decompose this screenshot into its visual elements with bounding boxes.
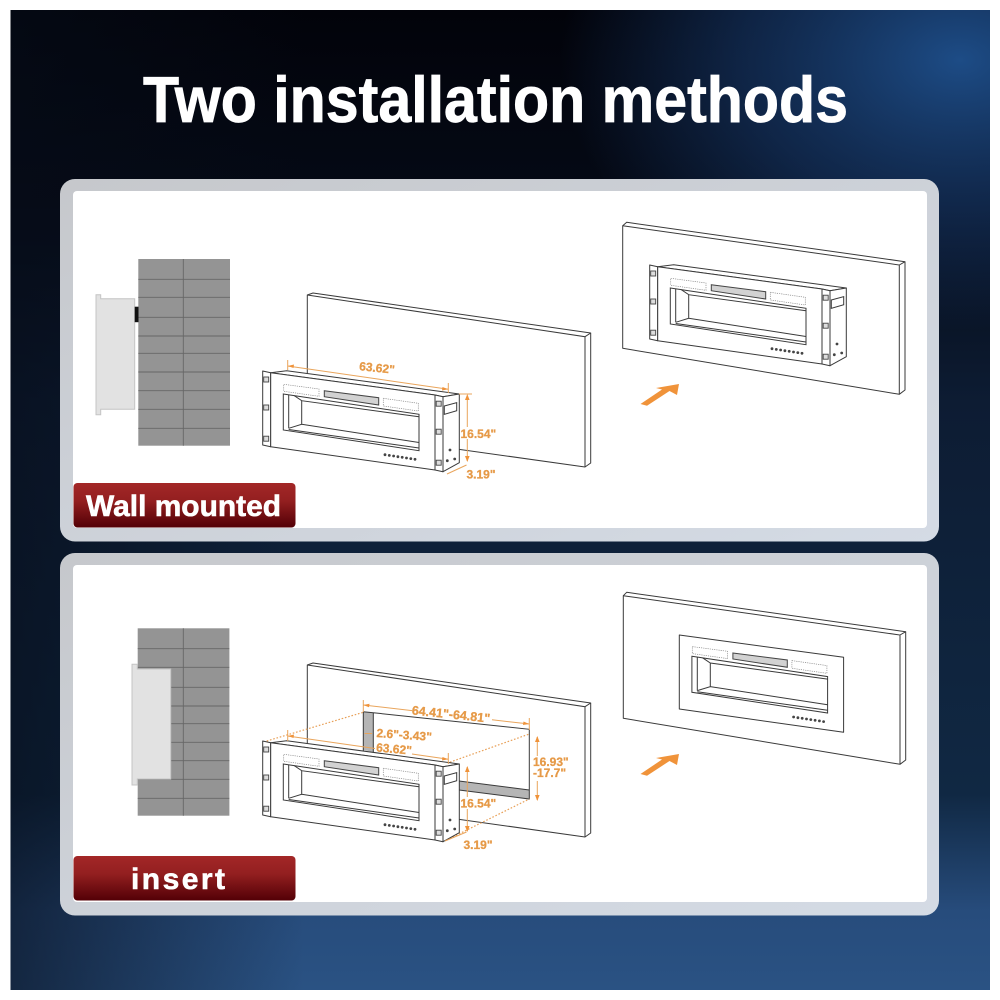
wall with fireplace and dimensions [263, 293, 591, 482]
dimension: opening depth: 2.6"-3.43" [376, 726, 432, 744]
title: Two installation methods [143, 63, 848, 136]
label: insert: insert [131, 863, 225, 896]
label: wall mounted: Wall mounted [86, 490, 281, 523]
wall with opening, fireplace and dimensions [263, 663, 591, 852]
dimension: opening height [532, 736, 569, 801]
dimension: depth [447, 465, 496, 482]
dotted outlines [267, 712, 529, 840]
dimension: height: 16.54" [460, 427, 496, 441]
arrow [640, 754, 679, 776]
dimension: opening height: -17.7" [533, 766, 566, 780]
side view: wall mounted [96, 259, 230, 446]
panel: insert [60, 553, 939, 916]
dimension: opening height: 16.93" [533, 755, 569, 769]
dimension: fireplace width [288, 730, 448, 764]
installed view: wall mounted [623, 222, 905, 394]
installed view: insert [623, 592, 906, 764]
dimension: opening width [363, 700, 529, 730]
dimension: height [459, 394, 496, 462]
dimension: fireplace height [460, 766, 496, 832]
wall opening [363, 712, 529, 799]
dimension: fireplace height: 16.54" [460, 796, 496, 810]
dimension: depth: 3.19" [466, 468, 496, 482]
dimension: fireplace depth: 3.19" [464, 838, 493, 852]
label: insert [74, 856, 296, 900]
dimension: width: 63.62" [359, 359, 395, 377]
dimension: width [288, 359, 448, 393]
side view: insert [132, 628, 229, 816]
arrow [640, 384, 679, 406]
dimension: opening width: 64.41"-64.81" [411, 703, 491, 726]
panel: wall mounted [60, 179, 939, 542]
dimension: fireplace width: 63.62" [376, 740, 412, 758]
dimension: fireplace depth [445, 832, 493, 852]
label: wall mounted [74, 483, 296, 528]
